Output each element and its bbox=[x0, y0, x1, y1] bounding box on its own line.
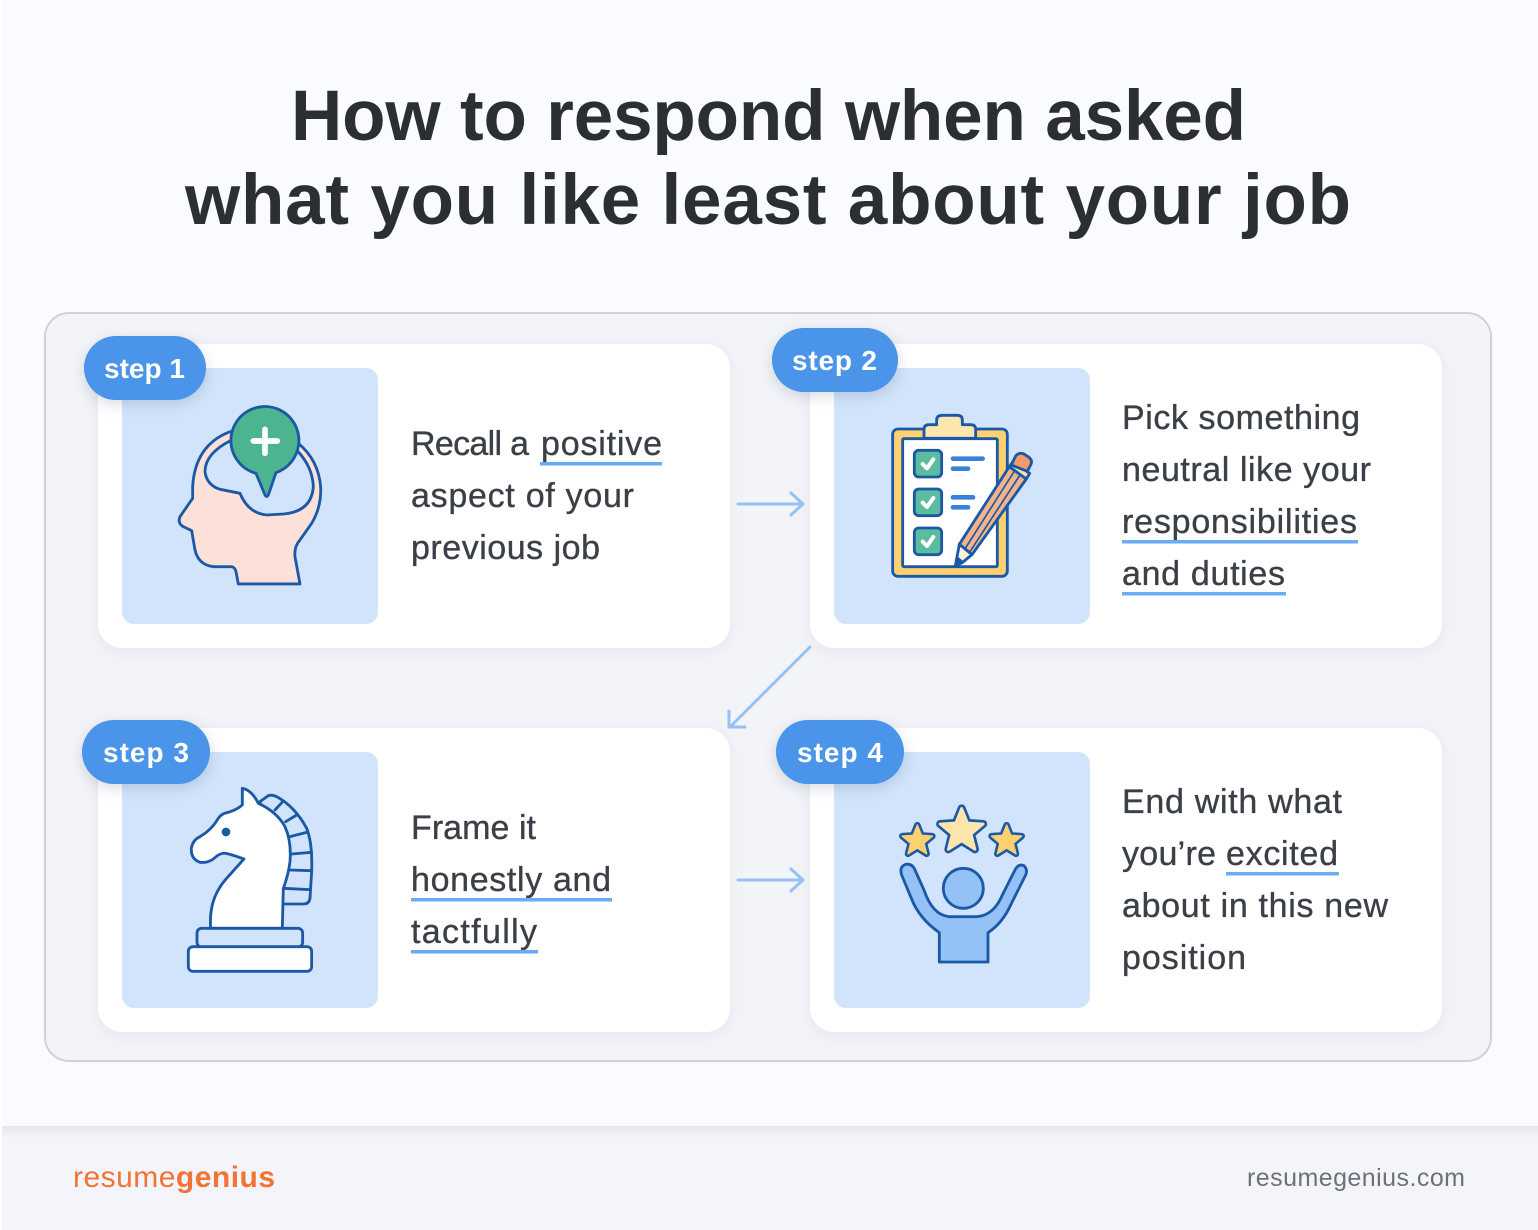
card: step 3 bbox=[82, 720, 730, 1032]
icon: head with positive thought bbox=[179, 407, 321, 584]
text: step 4: excited bbox=[1226, 835, 1338, 873]
badge: step 2 bbox=[772, 328, 898, 392]
text: step 1: previous job bbox=[411, 529, 600, 567]
badge: step 2: step 2 bbox=[792, 345, 877, 376]
text: step 2: responsibilities bbox=[1122, 503, 1357, 541]
logo: resumegenius bbox=[73, 1161, 275, 1194]
text: step 1: aspect of your bbox=[411, 477, 634, 515]
arrow: step 2 to step 3 bbox=[729, 647, 810, 727]
text: step 2: neutral like your bbox=[1122, 451, 1371, 489]
website: resumegenius.com bbox=[1247, 1164, 1465, 1192]
badge: step 3: step 3 bbox=[103, 737, 189, 768]
icon: clipboard and pencil bbox=[893, 415, 1032, 576]
arrow: step 1 to step 2 bbox=[738, 493, 803, 515]
title bbox=[184, 77, 1351, 240]
icon: person with stars bbox=[901, 808, 1027, 962]
badge: step 4: step 4 bbox=[797, 737, 883, 768]
badge: step 1: step 1 bbox=[104, 353, 185, 384]
card: step 2 bbox=[772, 328, 1442, 648]
card: step 4 bbox=[776, 720, 1442, 1032]
arrow: step 3 to step 4 bbox=[738, 869, 803, 891]
text: step 1: positive bbox=[541, 425, 662, 463]
text: step 2 bbox=[1122, 399, 1371, 596]
text: step 3: Frame it bbox=[411, 809, 537, 847]
text: step 1: Recall a bbox=[411, 425, 529, 463]
footer bbox=[2, 1126, 1538, 1230]
text: step 4: you’re bbox=[1122, 835, 1216, 873]
panel: steps container bbox=[45, 313, 1491, 1061]
title: what you like least about your job bbox=[184, 161, 1351, 240]
badge: step 4 bbox=[776, 720, 904, 784]
text: step 2: and duties bbox=[1122, 555, 1285, 593]
text: step 2: Pick something bbox=[1122, 399, 1360, 437]
text: step 4: about in this new bbox=[1122, 887, 1388, 925]
icon: chess knight bbox=[188, 788, 312, 971]
badge: step 3 bbox=[82, 720, 210, 784]
text: step 4: position bbox=[1122, 939, 1246, 977]
title: How to respond when asked bbox=[291, 77, 1246, 156]
text: step 3: honestly and bbox=[411, 861, 611, 899]
card: step 1 bbox=[84, 336, 730, 648]
text: step 4: End with what bbox=[1122, 783, 1343, 821]
text: step 1 bbox=[411, 425, 662, 567]
text: step 3: tactfully bbox=[411, 913, 537, 951]
badge: step 1 bbox=[84, 336, 206, 400]
text: step 3 bbox=[411, 809, 612, 954]
text: step 4 bbox=[1122, 783, 1388, 977]
